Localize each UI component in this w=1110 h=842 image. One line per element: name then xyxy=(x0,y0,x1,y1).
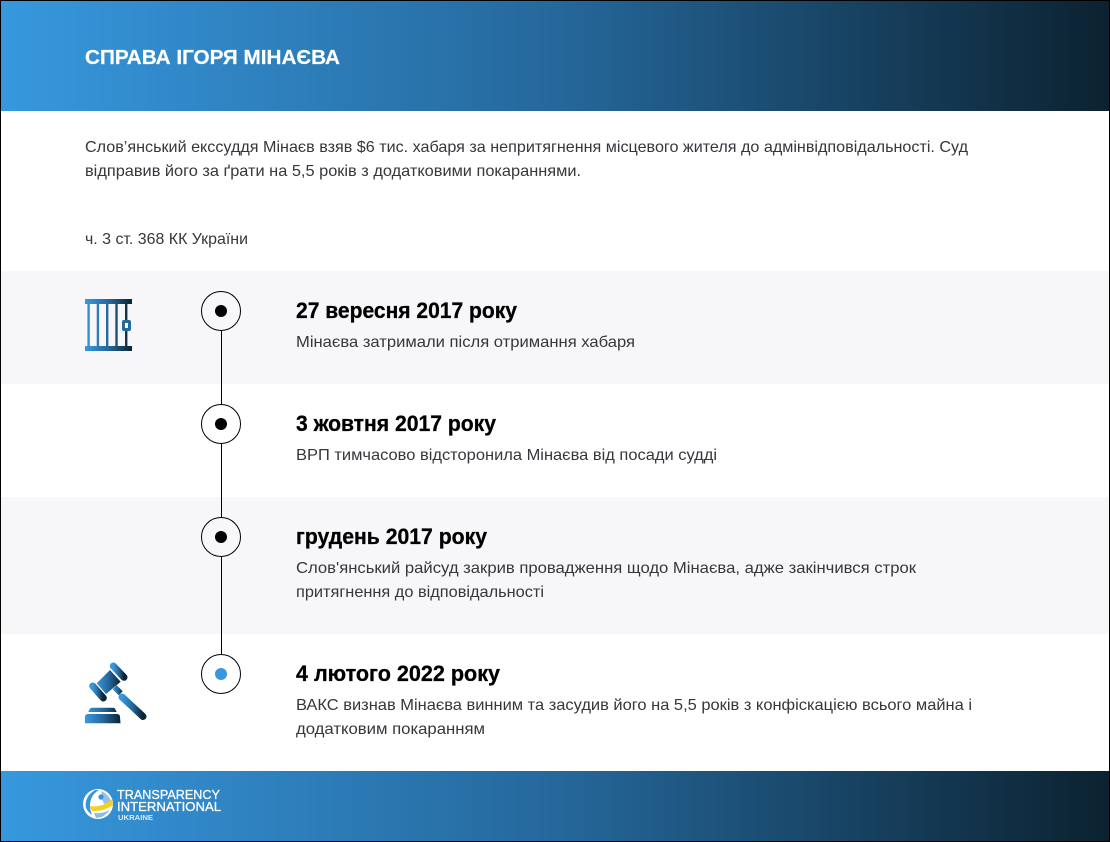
event 1 xyxy=(296,298,635,351)
title: СПРАВА ІГОРЯ МІНАЄВА xyxy=(85,47,340,69)
row background: 27 September 2017 xyxy=(1,271,1109,384)
event 2 xyxy=(296,411,717,464)
event 2: ВРП тимчасово відсторонила Мінаєва від посади судді xyxy=(296,447,717,464)
event 3: грудень 2017 року xyxy=(296,524,488,549)
icon: judge gavel xyxy=(85,666,143,723)
legal article reference: ч. 3 ст. 368 КК України xyxy=(85,231,248,248)
logo: Transparency International Ukraine xyxy=(83,787,221,822)
event 4 xyxy=(296,661,972,738)
event 2: 3 жовтня 2017 року xyxy=(296,411,497,436)
timeline marker 4 xyxy=(202,654,240,694)
event 4: додатковим покаранням xyxy=(296,721,485,738)
event 1: Мінаєва затримали після отримання хабаря xyxy=(296,334,635,351)
event 1: 27 вересня 2017 року xyxy=(296,298,518,323)
intro text xyxy=(85,139,969,180)
icon: prison bars xyxy=(85,299,132,351)
timeline marker 1 xyxy=(202,292,240,330)
event 3 xyxy=(296,524,917,601)
header band xyxy=(1,1,1109,111)
logo: Transparency International Ukraine: INTERNATIONAL xyxy=(117,799,221,814)
row background: December 2017 xyxy=(1,497,1109,634)
event 3: Слов'янський райсуд закрив провадження щодо Мінаєва, адже закінчився строк xyxy=(296,560,917,577)
timeline marker 3 xyxy=(202,518,240,556)
event 4: 4 лютого 2022 року xyxy=(296,661,501,686)
event 3: притягнення до відповідальності xyxy=(296,584,544,601)
intro text: відправив його за ґрати на 5,5 років з додатковими покараннями. xyxy=(85,163,581,180)
timeline marker 2 xyxy=(202,404,240,444)
timeline line xyxy=(220,331,222,654)
footer band xyxy=(1,771,1109,841)
event 4: ВАКС визнав Мінаєва винним та засудив його на 5,5 років з конфіскацією всього майна і xyxy=(296,697,972,714)
logo: Transparency International Ukraine: UKRAINE xyxy=(118,815,153,822)
intro text: Слов’янський екссуддя Мінаєв взяв $6 тис. хабаря за непритягнення місцевого жителя до адмінвідповідальності. Суд xyxy=(85,139,969,156)
logo: Transparency International Ukraine: TRANSPARENCY xyxy=(117,787,220,802)
